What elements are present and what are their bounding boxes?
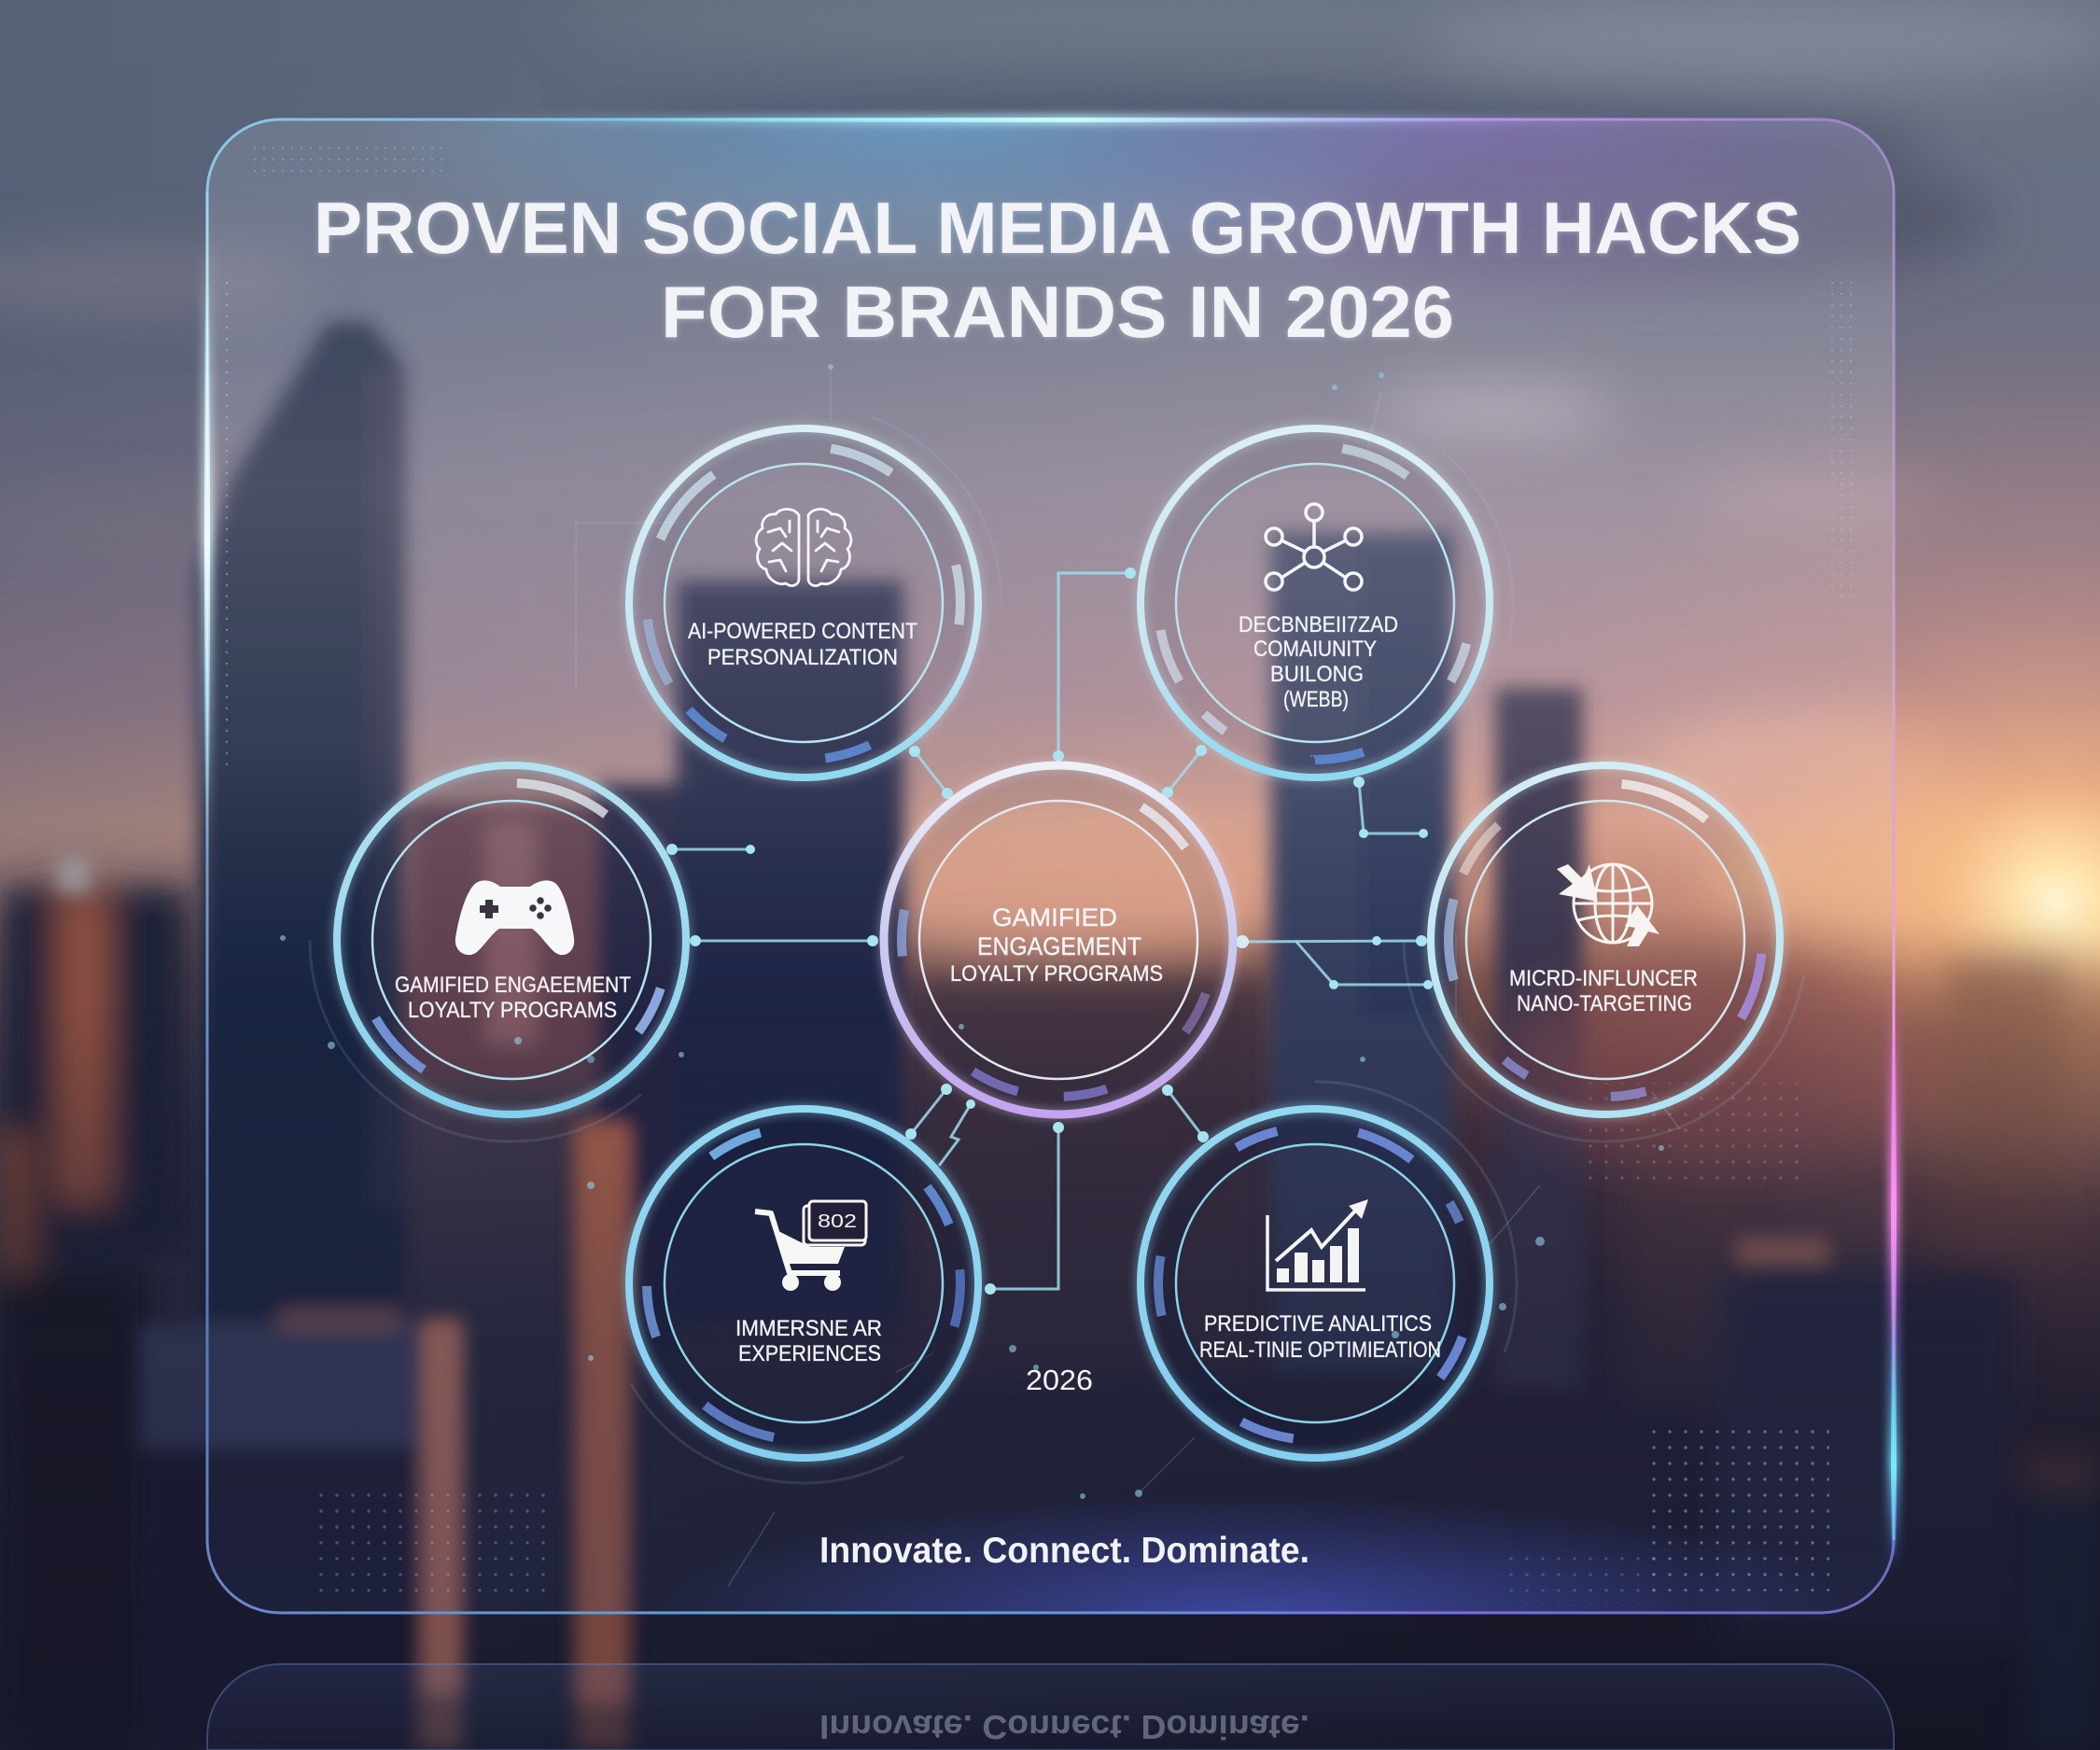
icon: network nodes [1266,504,1362,590]
label [735,1316,882,1366]
label: (WEBB) [1283,687,1349,712]
label: BUILONG [1270,662,1364,687]
icon: shopping cart with screen: 802 [818,1211,857,1232]
label: IMMERSNE AR [735,1316,882,1341]
label: COMAIUNITY [1253,637,1377,662]
connector: top-right hub branch [1353,777,1428,838]
connector: left hub to centre [690,935,878,946]
label: GAMIFIED ENGAEEMENT [395,973,631,998]
hack circle: gamified engagement (left) [337,765,686,1114]
peach horizon band [831,812,1335,952]
central hub circle [884,765,1233,1114]
connector: left hub stub [666,844,755,855]
year label: 2026 [1026,1364,1093,1396]
label: EXPERIENCES [738,1341,881,1366]
sun glow [1307,327,2100,1484]
label: MICRD-INFLUNCER [1509,966,1698,991]
title: FOR BRANDS IN 2026 [661,271,1454,353]
label: PERSONALIZATION [707,645,898,670]
connector: top-left hub to centre [909,746,953,799]
panel reflection [207,1664,1894,1750]
warm lower reflections [1493,952,2100,1162]
icon: shopping cart with screen [755,1201,866,1291]
border glow highlights [203,116,1898,1568]
connector: centre down to bottom-left hub [985,1122,1064,1295]
distant soft towers [0,887,2100,1750]
label [1509,966,1698,1016]
hack circle: AI-powered content personalization [629,428,978,777]
hack circle: immersive AR experiences [629,1109,978,1458]
label [1239,612,1398,712]
label [395,973,631,1023]
label [950,903,1163,987]
icon: brain [756,510,851,585]
label: LOYALTY PROGRAMS [950,961,1163,987]
label: REAL-TINIE OPTIMIEATION [1199,1337,1441,1363]
label: PREDICTIVE ANALITICS [1204,1311,1432,1337]
label [688,619,917,670]
hack circle: predictive analytics real-time optimization [1141,1109,1490,1458]
connector: centre to right hub branch [1296,942,1433,989]
dotted data textures [1587,1083,1811,1185]
label: AI-POWERED CONTENT [688,619,917,644]
glass panel [203,116,1898,1613]
connector: centre to bottom-right hub [1162,1085,1209,1142]
label [1199,1311,1441,1363]
clouds [0,0,2100,952]
tagline: Innovate. Connect. Dominate. [819,1531,1309,1571]
icon: globe with arrows [1557,864,1659,946]
towers [58,322,1829,1750]
label: DECBNBEII7ZAD [1239,612,1398,637]
faint orbit arcs [310,405,1807,1485]
label: NANO-TARGETING [1517,991,1692,1016]
connector: top-right hub to centre [1162,745,1207,798]
hub network connectors [280,364,1807,1587]
icon: game controller [455,880,574,955]
connector: centre to bottom-left hub [905,1084,975,1166]
panel border [207,119,1894,1613]
hack circle: micro-influencer nano-targeting [1431,765,1780,1114]
title [314,187,1801,353]
label: LOYALTY PROGRAMS [408,998,617,1023]
connector: centre to right hub [1236,935,1427,948]
connector: centre up to top-right hub [1053,567,1136,762]
label: ENGAGEMENT [977,932,1141,960]
hack circle: decentralized community building [1141,428,1490,777]
label: GAMIFIED [992,903,1117,931]
title: PROVEN SOCIAL MEDIA GROWTH HACKS [314,187,1801,269]
mirrored tagline: Innovate. Connect. Dominate. [819,1708,1309,1746]
icon: rising bar chart [1267,1199,1368,1290]
